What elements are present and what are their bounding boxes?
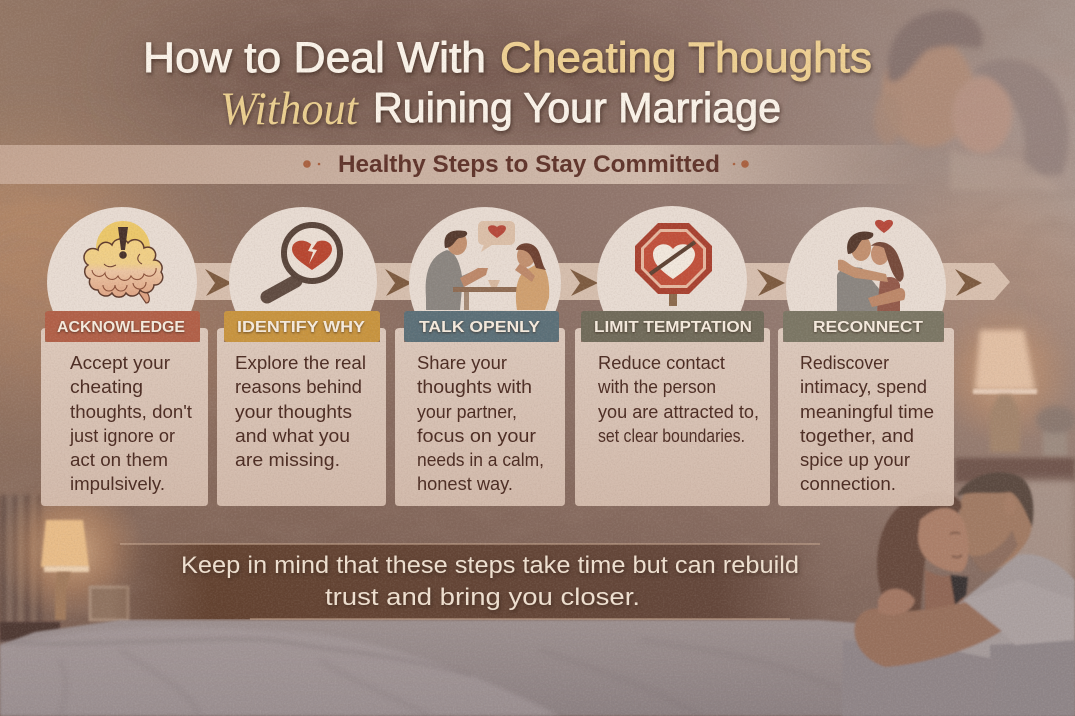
icon: brain with exclamation <box>84 221 163 303</box>
label: IDENTIFY WHY <box>237 319 366 336</box>
label <box>45 311 200 342</box>
card text: you are attracted to, <box>598 401 759 422</box>
step 3: talk openly <box>395 207 565 506</box>
card text: your thoughts <box>235 401 352 422</box>
card text: and what you <box>235 425 350 446</box>
card text: act on them <box>70 449 168 470</box>
woman's hand <box>878 589 915 615</box>
step 5: reconnect <box>778 207 954 506</box>
card text: focus on your <box>417 425 536 446</box>
label: LIMIT TEMPTATION <box>594 319 752 336</box>
closing note text: trust and bring you closer. <box>325 584 640 611</box>
icon: couple talking at table <box>426 221 549 310</box>
card text: needs in a calm, <box>417 449 544 470</box>
card text <box>395 328 565 506</box>
bed <box>0 620 1075 716</box>
photo: couple top right (faded) <box>874 10 1075 190</box>
card text: are missing. <box>235 449 340 470</box>
embracing arm <box>855 602 1003 667</box>
icon: stop sign with crossed heart <box>635 223 712 306</box>
man's t-shirt <box>880 554 1075 716</box>
left curtain <box>0 495 42 630</box>
card text: meaningful time <box>800 401 934 422</box>
title: Without <box>220 83 359 135</box>
closing note banner <box>110 544 825 619</box>
title: Ruining Your Marriage <box>373 84 781 131</box>
dome <box>409 207 561 311</box>
dome <box>597 206 747 311</box>
arrow 1 <box>205 269 232 296</box>
card text: Share your <box>417 352 507 373</box>
woman's face <box>918 508 969 572</box>
card text: intimacy, spend <box>800 376 927 397</box>
card text <box>575 328 770 506</box>
icon: embracing couple <box>837 220 905 311</box>
dome <box>47 207 197 311</box>
card text: thoughts, don't <box>70 401 192 422</box>
man's head and hair <box>957 472 1033 573</box>
label <box>404 311 559 342</box>
card text: Accept your <box>70 352 170 373</box>
woman's hair <box>877 492 962 615</box>
card text: your partner, <box>417 401 517 422</box>
step 2: identify why <box>217 207 386 506</box>
subtitle right ornament <box>733 160 749 168</box>
card text <box>778 328 954 506</box>
card text: reasons behind <box>235 376 362 397</box>
step 1: acknowledge <box>41 207 208 506</box>
card text <box>41 328 208 506</box>
card text: connection. <box>800 473 896 494</box>
left bedside lamp <box>0 480 145 642</box>
card text: Rediscover <box>800 352 889 373</box>
subtitle text: Healthy Steps to Stay Committed <box>338 151 720 178</box>
card text: Explore the real <box>235 352 366 373</box>
closing note text: Keep in mind that these steps take time but can rebuild <box>181 552 799 579</box>
card text: spice up your <box>800 449 910 470</box>
label: TALK OPENLY <box>419 319 541 336</box>
card text: Reduce contact <box>598 352 725 373</box>
arrow 2 <box>385 269 412 296</box>
arrow 5 <box>955 269 982 296</box>
arrow 3 <box>570 269 598 296</box>
woman's grey top <box>842 640 1000 716</box>
label: RECONNECT <box>813 319 924 336</box>
label <box>581 311 764 342</box>
dome <box>786 207 946 312</box>
card text: impulsively. <box>70 473 165 494</box>
label <box>224 311 380 342</box>
card text: with the person <box>597 376 716 397</box>
arrow 4 <box>757 269 785 296</box>
label: ACKNOWLEDGE <box>57 319 185 336</box>
subtitle band <box>0 145 925 184</box>
closing note text <box>181 552 799 611</box>
icon: magnifier with broken heart <box>267 225 340 297</box>
card text: honest way. <box>417 473 513 494</box>
title <box>143 34 872 135</box>
title: How to Deal With <box>143 34 486 82</box>
card text: cheating <box>70 376 143 397</box>
man's sleeve <box>963 580 1075 645</box>
title: Cheating Thoughts <box>500 34 872 82</box>
card text: set clear boundaries. <box>598 425 745 446</box>
process ribbon with end arrow <box>190 263 1010 300</box>
card text <box>217 328 386 506</box>
dome <box>229 207 377 311</box>
card text: thoughts with <box>417 376 532 397</box>
card text: together, and <box>800 425 914 446</box>
card text: just ignore or <box>69 425 175 446</box>
label <box>783 311 944 342</box>
photo: couple bottom right <box>842 472 1075 716</box>
right bedside lamp and flowers <box>935 305 1075 580</box>
subtitle left ornament <box>303 160 320 168</box>
step 4: limit temptation <box>575 206 770 506</box>
